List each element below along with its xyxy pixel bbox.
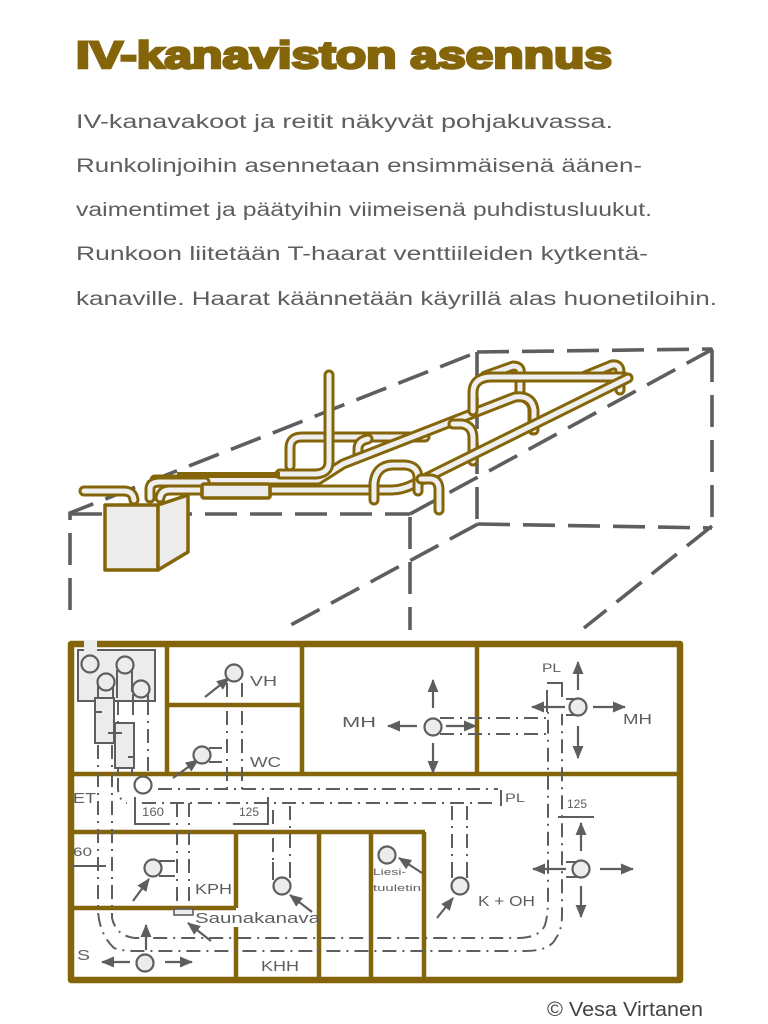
main upper duct — [155, 377, 624, 480]
room labels: KPH — [195, 881, 232, 898]
upper duct dark band — [177, 472, 280, 478]
text block: introduction: Runkoon liitetään T-haarat venttiileiden kytkentä- — [76, 244, 648, 265]
text block: introduction — [76, 112, 717, 310]
ventilation unit in plan — [78, 640, 155, 775]
room labels: Liesi- — [373, 867, 406, 878]
title: IV-kanaviston asennus — [76, 35, 612, 77]
valves — [134, 664, 590, 972]
left ducts at unit — [84, 482, 205, 500]
room labels: Saunakanava — [195, 910, 321, 927]
silencer — [202, 484, 270, 498]
sauna duct grille — [174, 909, 193, 915]
3D diagram: building outline and duct network — [70, 349, 713, 630]
text block: introduction: vaimentimet ja päätyihin viimeisenä puhdistusluukut. — [76, 200, 652, 221]
dimension marks — [72, 683, 594, 866]
room labels: 125 — [239, 805, 259, 819]
walls — [71, 644, 680, 980]
room labels: VH — [250, 673, 277, 690]
text block: introduction: IV-kanavakoot ja reitit näkyvät pohjakuvassa. — [76, 112, 613, 133]
room labels: MH — [623, 711, 652, 728]
main lower duct — [270, 378, 628, 510]
back branch duct — [290, 437, 425, 466]
room labels: 160 — [142, 805, 164, 819]
room labels: S — [77, 947, 90, 964]
vertical exhaust duct — [280, 375, 329, 474]
room labels: tuuletin — [373, 883, 421, 894]
copyright credit: © Vesa Virtanen — [547, 999, 703, 1021]
dashed building outline — [70, 349, 713, 630]
text block: introduction: kanaville. Haarat käännetään käyrillä alas huonetiloihin. — [76, 289, 717, 310]
far branch ducts — [485, 365, 620, 430]
room labels: 60 — [73, 845, 92, 859]
arrows — [102, 662, 633, 962]
text block: introduction: Runkolinjoihin asennetaan ensimmäisenä äänen- — [76, 156, 642, 177]
room labels: K + OH — [478, 893, 535, 910]
room labels: MH — [342, 714, 376, 731]
room labels: PL — [542, 661, 561, 675]
duct routes — [98, 683, 581, 951]
room labels: PL — [505, 791, 525, 805]
floor plan — [71, 640, 680, 980]
room labels: WC — [250, 754, 281, 771]
room labels: KHH — [261, 958, 299, 975]
room labels: 125 — [567, 797, 587, 811]
room labels — [73, 661, 652, 975]
room labels: ET — [73, 790, 96, 807]
ventilation unit box — [105, 495, 188, 570]
